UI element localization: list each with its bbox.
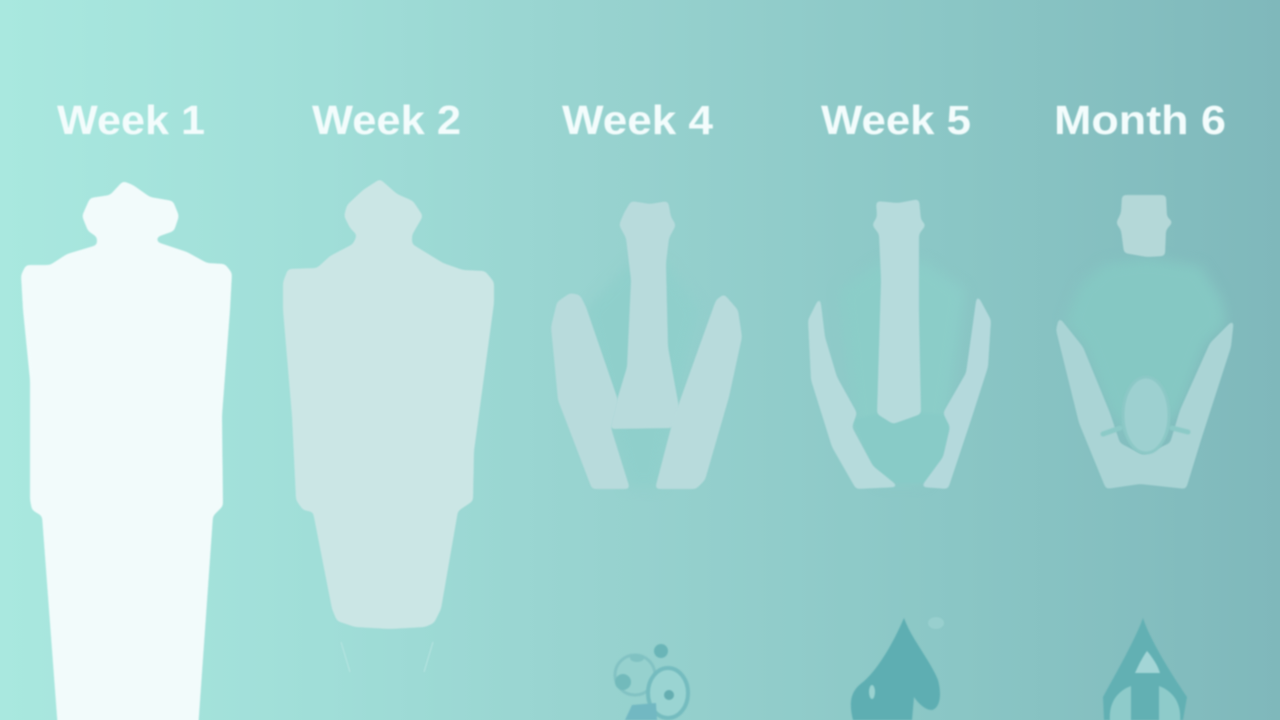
right arm (655, 294, 742, 489)
faint body haze (840, 262, 965, 483)
silhouette: Week 1 (21, 181, 232, 720)
left arm (551, 293, 630, 489)
inner bowl (853, 413, 950, 483)
left arm (808, 296, 899, 489)
stem and crossbar (610, 201, 679, 429)
icon: Week 4 embryo (615, 644, 688, 720)
right arm (921, 294, 991, 489)
stem (872, 199, 926, 424)
head (1116, 195, 1173, 257)
illustration: Week 5 (808, 199, 991, 489)
silhouette: Week 2 (283, 179, 494, 672)
heading: Week 1: Week 1 (57, 97, 205, 143)
faint body (1065, 258, 1226, 450)
headings (57, 97, 1226, 143)
icon: Week 5 droplet (851, 617, 944, 720)
heading: Week 2: Week 2 (312, 97, 461, 143)
faint body haze (585, 262, 700, 487)
arms (1056, 317, 1234, 489)
illustration: Month 6 (1056, 195, 1234, 489)
heading: Week 4: Week 4 (562, 97, 713, 143)
icon: Month 6 droplet (1103, 618, 1187, 720)
embryo (1103, 377, 1188, 453)
illustration: Week 4 (551, 201, 742, 489)
heading: Week 5: Week 5 (821, 97, 971, 143)
heading: Month 6: Month 6 (1054, 97, 1226, 143)
